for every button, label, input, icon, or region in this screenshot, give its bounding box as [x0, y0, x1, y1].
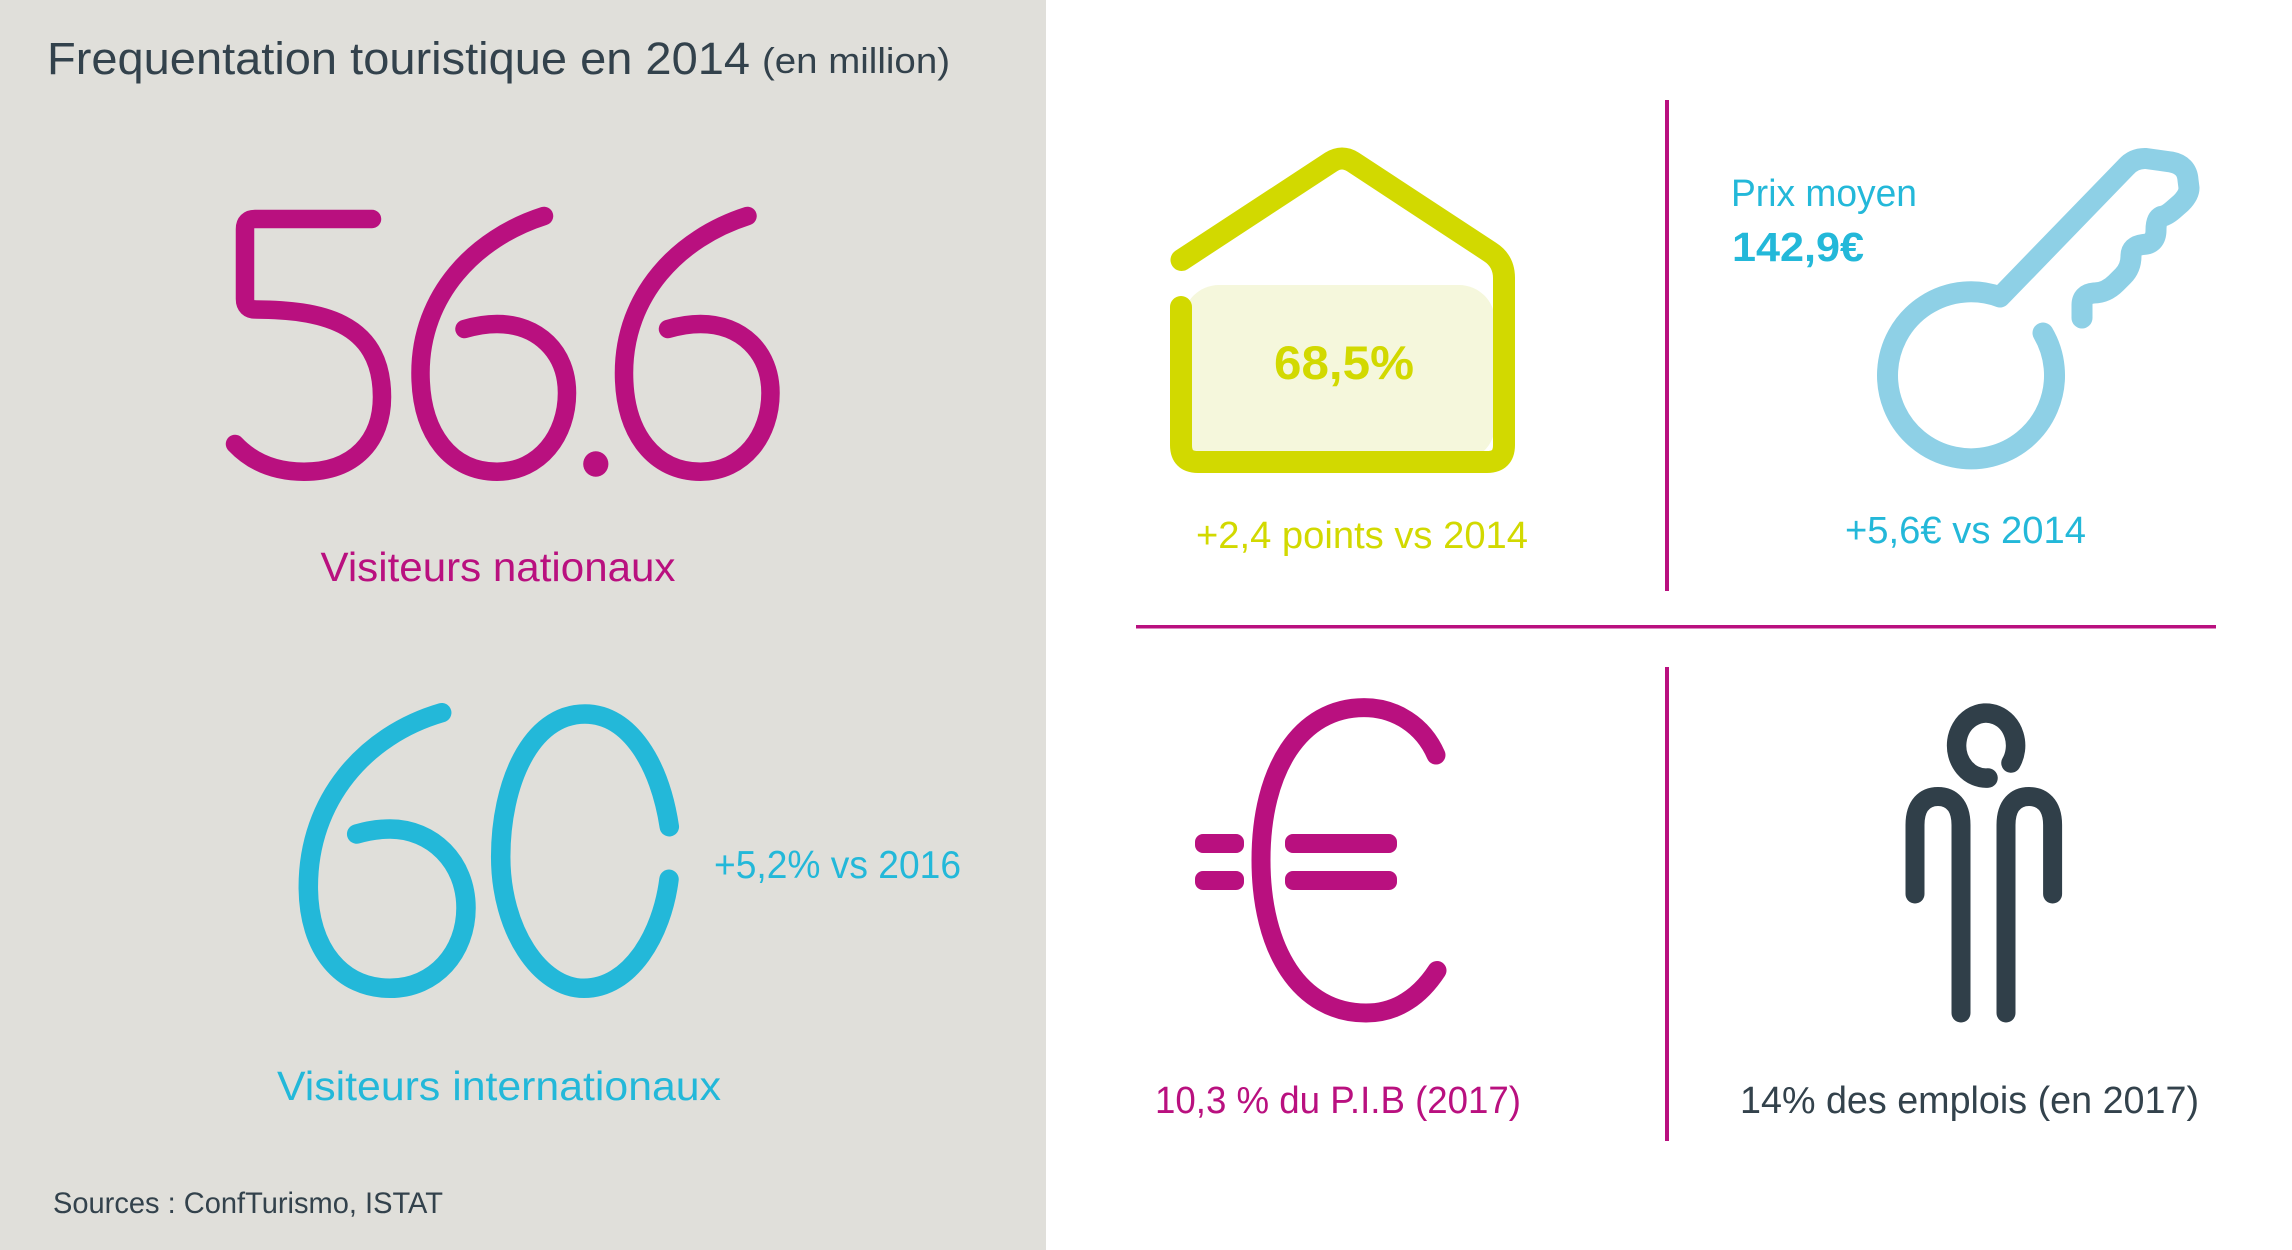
- label: prix moyen: Prix moyen: [1731, 173, 1917, 215]
- value: 68,5%: 68,5%: [1274, 336, 1414, 389]
- label: 10,3 % du P.I.B (2017): 10,3 % du P.I.B (2017): [1155, 1080, 1521, 1122]
- title: Frequentation touristique en 2014: [47, 33, 750, 84]
- icon: euro: [1195, 708, 1437, 1013]
- big number: 60: [308, 713, 669, 988]
- change: +2,4 points vs 2014: +2,4 points vs 2014: [1196, 515, 1528, 557]
- icon: person: [1915, 713, 2053, 1013]
- sources: Sources : ConfTurismo, ISTAT: [53, 1187, 443, 1220]
- label: visiteurs nationaux: Visiteurs nationaux: [320, 544, 676, 590]
- label: visiteurs internationaux: Visiteurs internationaux: [277, 1063, 722, 1109]
- panel: occupancy: [1181, 158, 1528, 557]
- big number: 56.6: [235, 216, 770, 477]
- panel: visitor numbers: [0, 0, 1046, 1250]
- change: +5,2% vs 2016: +5,2% vs 2016: [714, 844, 961, 887]
- icon: key: [1888, 158, 2189, 459]
- title: (en million): [762, 40, 950, 81]
- icon: house: [1181, 158, 1504, 462]
- panel: share of jobs: [1740, 713, 2199, 1122]
- value: 142,9€: 142,9€: [1732, 224, 1864, 270]
- panel: share of GDP: [1155, 708, 1521, 1122]
- panel: average price: [1731, 158, 2189, 552]
- label: 14% des emplois (en 2017): 14% des emplois (en 2017): [1740, 1080, 2199, 1122]
- change: +5,6€ vs 2014: +5,6€ vs 2014: [1845, 510, 2086, 552]
